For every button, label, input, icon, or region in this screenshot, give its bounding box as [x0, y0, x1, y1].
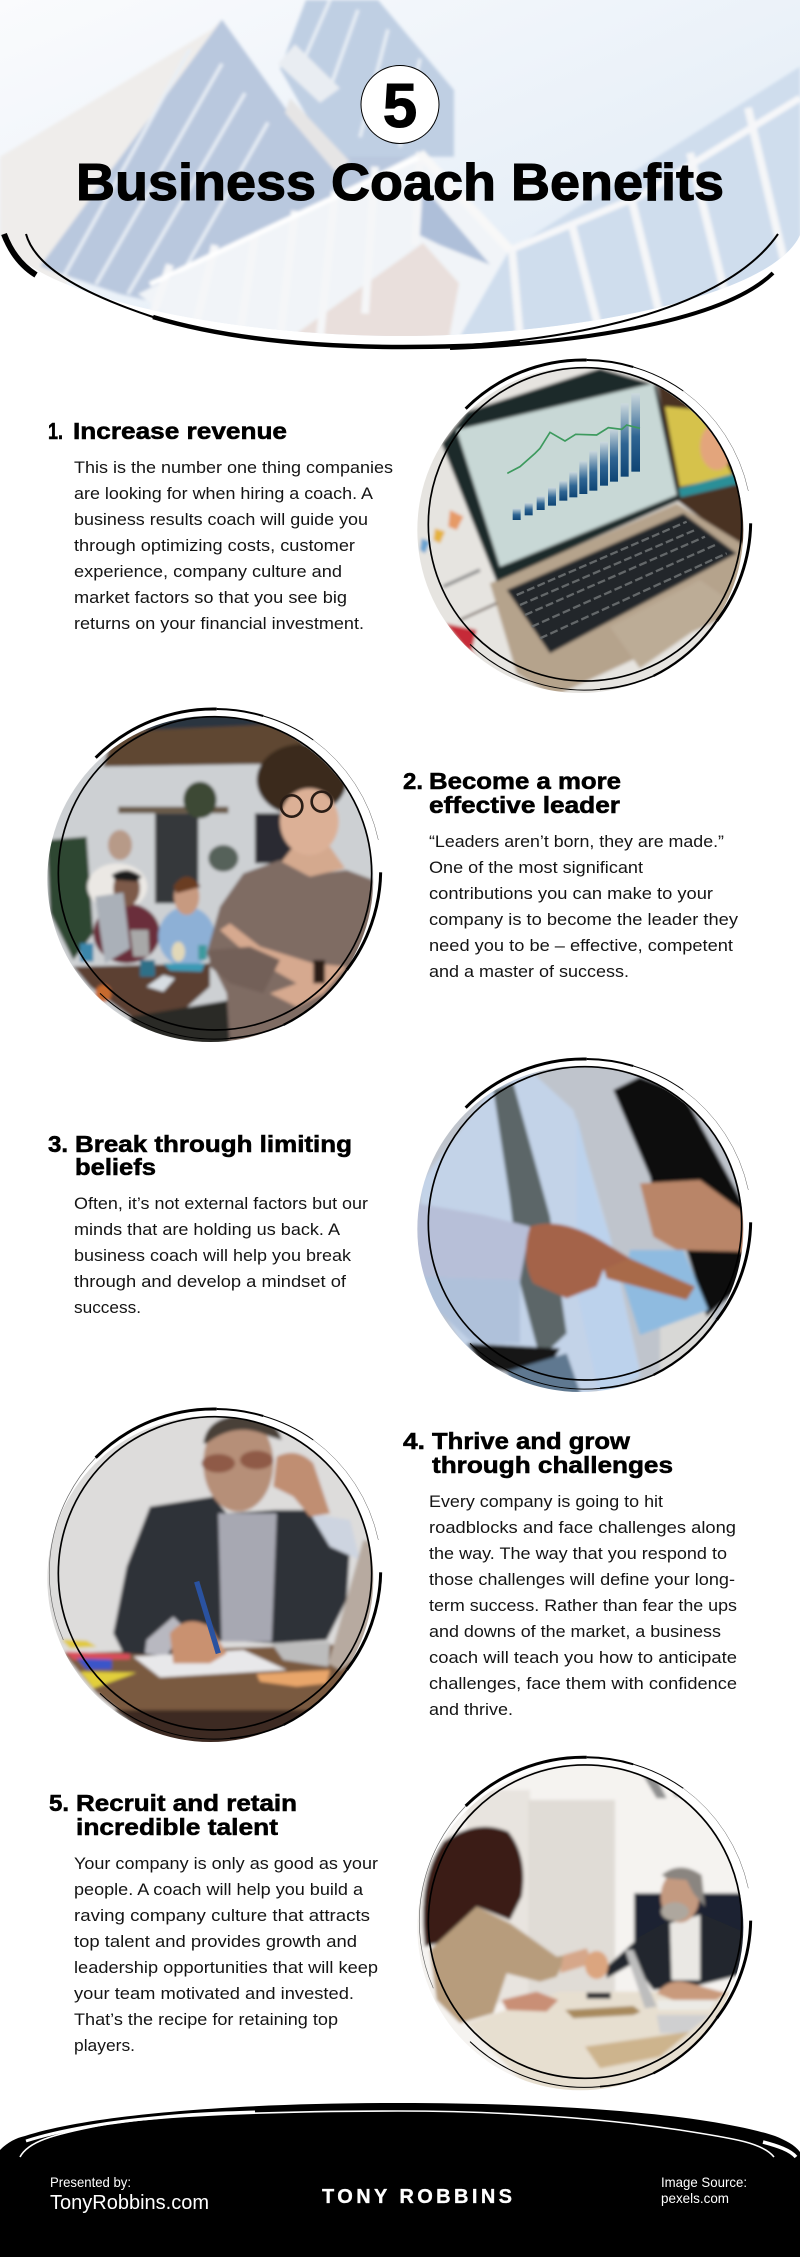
body 1: through optimizing costs, customer	[74, 537, 356, 555]
body 2: and a master of success.	[429, 963, 629, 981]
body 3: Often, it’s not external factors but our	[74, 1195, 369, 1213]
body 1: are looking for when hiring a coach. A	[74, 485, 373, 503]
photo: man on phone writing at desk	[43, 1409, 381, 1750]
body 3: business coach will help you break	[74, 1247, 352, 1265]
body 2	[429, 833, 739, 981]
photo: laptop with revenue chart	[413, 360, 751, 700]
heading 3	[48, 1131, 352, 1180]
body 2: need you to be – effective, competent	[429, 937, 733, 955]
body 5: players.	[74, 2037, 135, 2055]
heading 2: effective leader	[429, 792, 620, 818]
decorative ring around photo 4	[49, 1409, 381, 1739]
body 1: returns on your financial investment.	[74, 615, 364, 633]
body 4: Every company is going to hit	[429, 1493, 663, 1511]
body 4	[429, 1493, 737, 1719]
body 3: minds that are holding us back. A	[74, 1221, 340, 1239]
image source: pexels.com	[661, 2190, 729, 2206]
header banner photo: building	[0, 0, 800, 345]
image source: Image Source:	[661, 2174, 747, 2190]
heading 1: 1.	[48, 418, 63, 444]
heading 4: 4.	[403, 1428, 425, 1454]
body 5: leadership opportunities that will keep	[74, 1959, 378, 1977]
body 4: those challenges will define your long-	[429, 1571, 735, 1589]
body 2: “Leaders aren’t born, they are made.”	[429, 833, 724, 851]
body 5: your team motivated and invested.	[74, 1985, 354, 2003]
decorative ring around photo 3	[428, 1059, 751, 1389]
heading 2: Become a more	[429, 768, 621, 794]
presented by	[50, 2174, 209, 2214]
number badge	[361, 66, 439, 144]
body 4: and downs of the market, a business	[429, 1623, 721, 1641]
heading 4: through challenges	[432, 1452, 673, 1478]
panel: benefit 4 text	[403, 1428, 737, 1719]
body 5: Your company is only as good as your	[74, 1855, 379, 1873]
body 4: roadblocks and face challenges along	[429, 1519, 736, 1537]
body 3	[74, 1195, 369, 1317]
body 1	[74, 459, 393, 633]
body 3: through and develop a mindset of	[74, 1273, 346, 1291]
footer band	[0, 2103, 800, 2257]
body 3: success.	[74, 1299, 141, 1317]
heading 5: 5.	[49, 1790, 69, 1816]
body 1: This is the number one thing companies	[74, 459, 393, 477]
number badge: 5	[383, 72, 417, 141]
photo: interview handshake at table	[413, 1757, 751, 2107]
heading 2	[403, 768, 621, 818]
body 2: contributions you can make to your	[429, 885, 714, 903]
panel: benefit 5 text	[49, 1790, 379, 2055]
presented by: Presented by:	[50, 2174, 131, 2190]
heading 3: Break through limiting	[75, 1131, 352, 1157]
body 2: One of the most significant	[429, 859, 643, 877]
heading 1: Increase revenue	[73, 418, 287, 444]
presented by: TonyRobbins.com	[50, 2192, 209, 2214]
body 5: people. A coach will help you build a	[74, 1881, 364, 1899]
heading 4: Thrive and grow	[432, 1428, 630, 1454]
body 4: term success. Rather than fear the ups	[429, 1597, 737, 1615]
photo: confident woman leader	[43, 709, 381, 1050]
body 1: business results coach will guide you	[74, 511, 368, 529]
heading 5: incredible talent	[76, 1814, 278, 1840]
decorative ring around photo 5	[419, 1757, 751, 2087]
heading 4	[403, 1428, 673, 1478]
body 5: top talent and provides growth and	[74, 1933, 357, 1951]
image source	[661, 2174, 747, 2206]
body 4: the way. The way that you respond to	[429, 1545, 727, 1563]
heading 3: beliefs	[75, 1154, 156, 1180]
body 5	[74, 1855, 379, 2055]
brand name: TONY ROBBINS	[322, 2186, 512, 2208]
body 4: challenges, face them with confidence	[429, 1675, 737, 1693]
body 4: coach will teach you how to anticipate	[429, 1649, 737, 1667]
body 4: and thrive.	[429, 1701, 513, 1719]
decorative ring around photo 2	[58, 709, 381, 1039]
heading 5: Recruit and retain	[76, 1790, 297, 1816]
body 1: experience, company culture and	[74, 563, 342, 581]
heading 5	[49, 1790, 297, 1840]
heading 3: 3.	[48, 1131, 68, 1157]
body 5: That’s the recipe for retaining top	[74, 2011, 338, 2029]
body 2: company is to become the leader they	[429, 911, 739, 929]
panel: benefit 1 text	[48, 418, 393, 633]
title: Business Coach Benefits	[76, 154, 724, 212]
body 5: raving company culture that attracts	[74, 1907, 370, 1925]
panel: benefit 2 text	[403, 768, 739, 981]
footer curve lines	[20, 2111, 796, 2157]
photo: handshake	[413, 1059, 751, 1400]
panel: benefit 3 text	[48, 1131, 369, 1317]
header swoosh lines	[4, 234, 778, 348]
heading 2: 2.	[403, 768, 423, 794]
body 1: market factors so that you see big	[74, 589, 347, 607]
decorative ring around photo 1	[428, 360, 751, 690]
